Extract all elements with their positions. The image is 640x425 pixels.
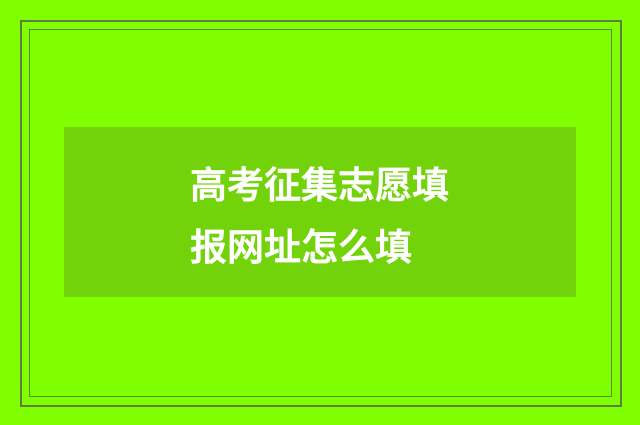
title text bbox=[190, 165, 449, 268]
title line 1: 高考征集志愿填 bbox=[190, 165, 449, 206]
inner border frame bbox=[29, 29, 612, 397]
title line 2: 报网址怎么填 bbox=[190, 227, 412, 268]
title panel bbox=[64, 127, 576, 297]
